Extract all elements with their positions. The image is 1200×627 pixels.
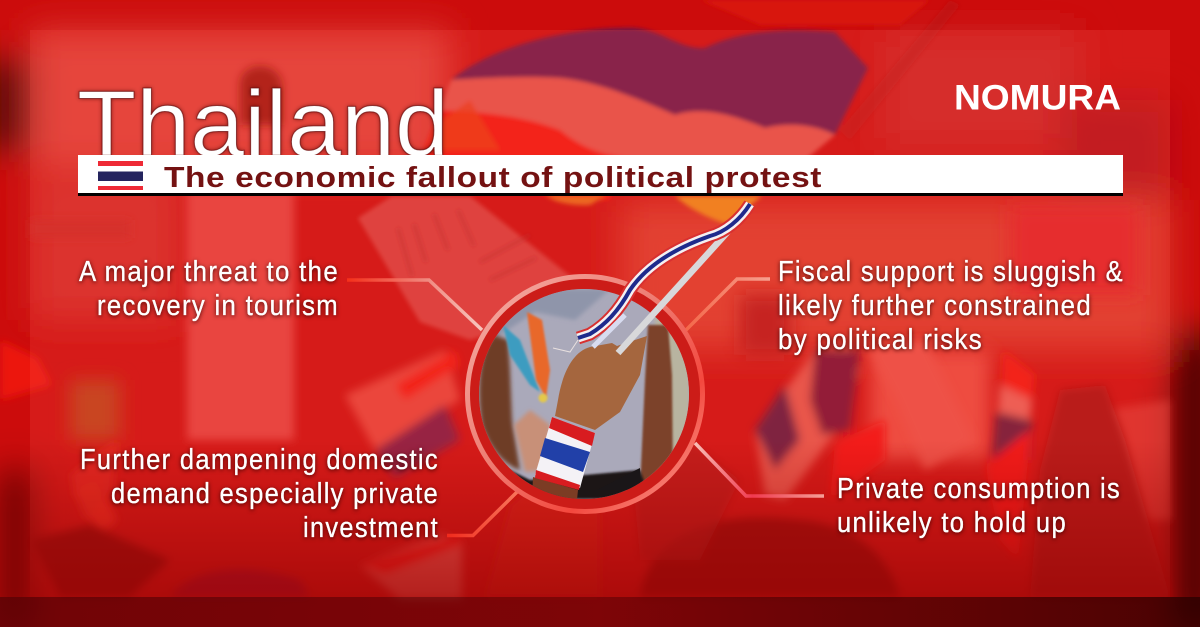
title: Thailand: Thailand [77,72,449,176]
left and right crowd flags [0,340,1170,600]
text: tourism: recovery in tourism [97,290,339,322]
bottom dark strip [0,597,1200,627]
subtitle text: The economic fallout of political protest [164,162,822,194]
outer ring [468,276,702,512]
text: tourism [79,256,339,322]
lower panel shading [30,440,1170,597]
text: fiscal support: likely further constrained [778,290,1092,322]
text: private consumption [837,473,1121,539]
crowd silhouettes [30,385,1170,597]
connector lines [347,279,824,536]
text: domestic demand: investment [303,512,439,544]
flag pole and ribbon [553,204,752,353]
text: fiscal support [778,256,1124,356]
icon: Thai flag [98,161,143,190]
building pillar and arch [30,66,294,440]
large flag waving top [420,0,960,224]
text: domestic demand: Further dampening domestic [80,444,439,476]
text: private consumption: unlikely to hold up [837,507,1067,539]
text: fiscal support: by political risks [778,324,983,356]
text: tourism: A major threat to the [79,256,339,288]
hand photo [479,289,690,500]
text: fiscal support: Fiscal support is sluggish & [778,256,1124,288]
logo: Nomura: NOMURA [954,78,1121,118]
central circular photo [468,204,752,512]
text: domestic demand: demand especially private [111,478,439,510]
placard [358,196,600,340]
subtitle bar [78,155,1123,196]
title: Thailand: Thailand [77,72,449,176]
text: private consumption: Private consumption is [837,473,1121,505]
text: domestic demand [80,444,439,544]
